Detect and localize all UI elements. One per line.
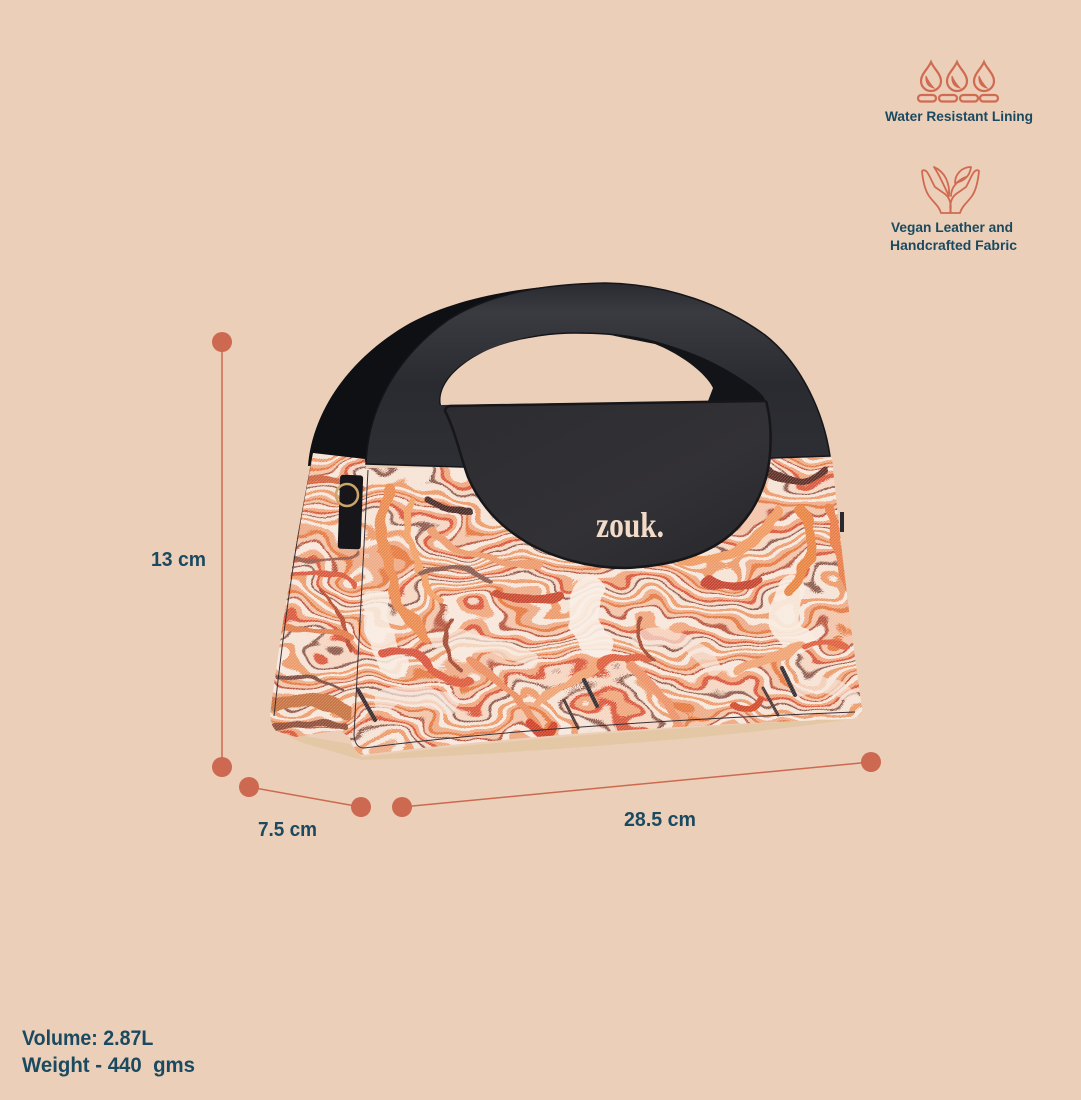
water resistant label: Water Resistant Lining	[885, 108, 1033, 124]
interior of back handle	[610, 335, 766, 403]
flap	[445, 401, 771, 568]
height measure	[212, 332, 232, 777]
brown streaks	[420, 569, 490, 580]
brand logo: zouk.	[596, 505, 664, 545]
cream areas	[375, 600, 395, 665]
vegan leather label: Vegan Leather and	[891, 219, 1013, 235]
right side strap	[840, 512, 844, 532]
orange swirls	[382, 490, 425, 640]
volume and weight text: Weight - 440 gms	[22, 1054, 195, 1077]
back handle	[308, 284, 600, 466]
front fabric panel	[350, 458, 862, 755]
depth label: 7.5 cm	[258, 819, 317, 841]
dark streaks straight	[358, 668, 795, 728]
bag photo	[270, 282, 862, 760]
volume and weight text: Volume: 2.87L	[22, 1027, 154, 1050]
icon: water drops over lining	[918, 62, 998, 102]
strap loop with ring	[336, 475, 363, 549]
depth measure	[239, 777, 371, 817]
front handle	[366, 283, 830, 467]
side panel	[270, 453, 366, 738]
red bands	[497, 592, 560, 599]
handle hole	[441, 335, 713, 405]
height label: 13 cm	[151, 549, 206, 571]
width label: 28.5 cm	[624, 809, 696, 831]
icon: hands holding leaf	[922, 167, 979, 213]
width measure	[392, 752, 881, 817]
ground shadow	[282, 718, 856, 760]
vegan leather label: Handcrafted Fabric	[890, 237, 1017, 253]
